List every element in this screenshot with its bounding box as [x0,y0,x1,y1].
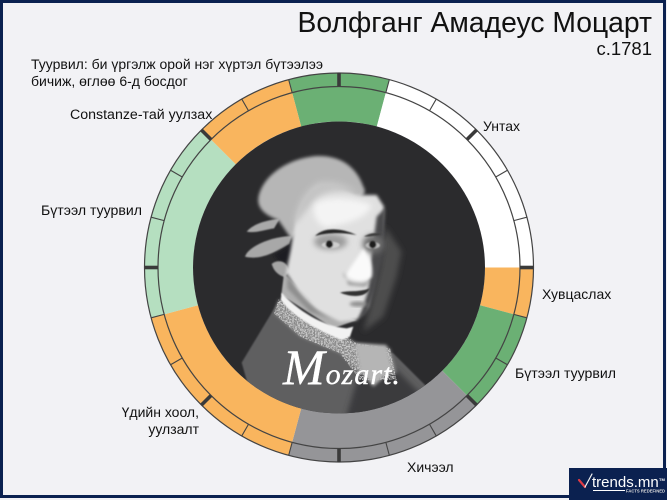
collar speckle [274,299,397,380]
hour ticks [151,80,527,455]
segment: dressing [480,268,534,318]
note: composing habit: бичиж, өглөө 6-д босдог [31,73,188,89]
eye socket right [363,235,384,253]
eyebrow left [315,229,357,236]
portrait of Mozart [193,121,485,427]
label: dinner and meetings: Үдийн хоол, [122,404,199,420]
segment: lessons [289,371,477,462]
icon: check mark [579,474,592,487]
cheek right shadow [359,208,385,318]
segment: composing, top [289,73,389,126]
note: composing habit [31,56,323,89]
note: composing habit: Туурвил: би үргэлж орой нэг хүртэл бүтээлээ [31,56,323,72]
dark lower coat [345,369,419,414]
ear shadow [274,242,291,262]
forehead highlight [314,198,372,227]
eye socket left [314,234,347,250]
logo: trends.mn: trends.mn [592,474,659,491]
title: Волфганг Амадеус Моцарт [297,6,652,38]
embroidered collar [274,299,397,373]
coat [241,304,426,414]
eye right [365,241,380,249]
label: lessons: Хичээл [407,459,454,475]
signature: Mozart. [282,339,401,395]
eye left [322,241,340,248]
segment: composing, left [145,130,236,318]
segment: composing, right [442,305,527,405]
white stock [281,293,353,340]
hairline blend [297,181,348,222]
logo: trends.mn [569,468,667,500]
ring outlines [144,73,534,462]
segment: meeting Constanze [201,80,301,164]
label: composing, right: Бүтээл туурвил [515,365,616,381]
face [286,185,384,322]
dark hair at neck, right [363,227,402,332]
feather curls [247,218,280,232]
hair [258,156,365,239]
neck [281,273,357,328]
daily schedule ring [144,73,534,462]
logo: trends.mn: TM [659,477,665,482]
three-hour ticks [144,73,534,462]
nose [347,248,372,281]
label: dressing: Хувцаслах [542,286,611,302]
label: meeting Constanze: Constanze-тай уулзах [70,107,212,123]
nose shadow [343,272,372,287]
lace [355,343,392,387]
label: dinner and meetings [122,404,200,437]
segment: dinner and meetings [151,305,301,455]
eyebrow right [364,233,382,237]
mouth [340,288,370,296]
date: с.1781 [596,38,652,59]
logo: trends.mn: FACTS REDEFINED [626,488,665,494]
jaw shading [286,274,327,318]
lip shadow [350,301,367,307]
label: dinner and meetings: уулзалт [148,421,200,437]
segment: sleep [377,80,534,267]
label: composing, left: Бүтээл туурвил [41,202,142,218]
ear [272,261,289,277]
label: sleep: Унтах [483,118,520,134]
